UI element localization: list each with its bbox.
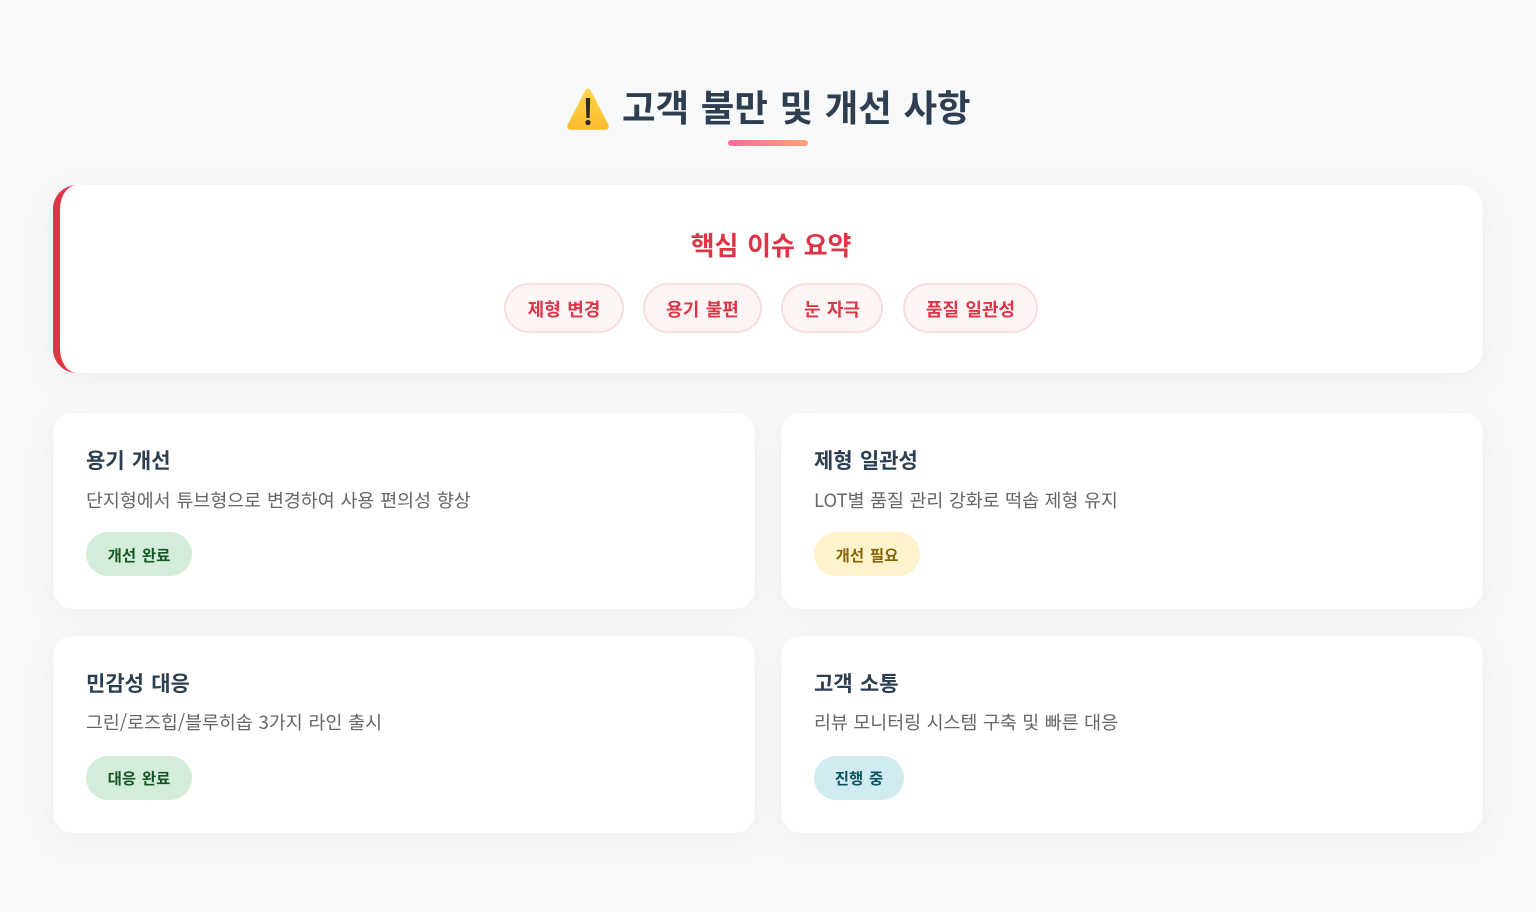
status badge: response complete	[86, 756, 192, 800]
status badge: needs improvement: 개선 필요	[836, 544, 898, 566]
panel: customer communication	[781, 636, 1483, 833]
card heading: sensitivity response: 민감성 대응	[86, 668, 190, 698]
panel: formulation consistency	[781, 413, 1483, 609]
card text: container improvement: 단지형에서 튜브형으로 변경하여 사용 편의성 향상	[86, 487, 471, 513]
card heading: formulation consistency: 제형 일관성	[814, 445, 918, 475]
status badge: response complete: 대응 완료	[108, 767, 170, 789]
status badge: in progress: 진행 중	[835, 767, 883, 789]
tag: container inconvenience	[643, 283, 762, 333]
panel: container improvement	[53, 413, 755, 609]
tag: quality consistency	[903, 283, 1038, 333]
heading: key issue summary: 핵심 이슈 요약	[691, 226, 851, 263]
status badge: improved: 개선 완료	[108, 544, 170, 566]
tag: eye irritation: 눈 자극	[804, 296, 860, 322]
tag: quality consistency: 품질 일관성	[926, 296, 1015, 322]
card heading: customer communication: 고객 소통	[814, 668, 899, 698]
card heading: container improvement: 용기 개선	[86, 445, 171, 475]
card text: customer communication: 리뷰 모니터링 시스템 구축 및 빠른 대응	[814, 709, 1118, 735]
tag: container inconvenience: 용기 불편	[666, 296, 739, 322]
title: 고객 불만 및 개선 사항	[622, 79, 971, 132]
tag: formulation change	[504, 283, 624, 333]
tag: eye irritation	[781, 283, 883, 333]
tag: formulation change: 제형 변경	[528, 296, 600, 322]
title underline	[728, 140, 808, 146]
status badge: improved	[86, 532, 192, 576]
icon: warning triangle	[567, 88, 609, 130]
panel: key issue summary	[53, 185, 1483, 373]
card text: formulation consistency: LOT별 품질 관리 강화로 떡솝 제형 유지	[814, 487, 1118, 513]
panel: sensitivity response	[53, 636, 755, 833]
status badge: needs improvement	[814, 532, 920, 576]
card text: sensitivity response: 그린/로즈힙/블루히솝 3가지 라인 출시	[86, 709, 382, 735]
status badge: in progress	[814, 756, 904, 800]
